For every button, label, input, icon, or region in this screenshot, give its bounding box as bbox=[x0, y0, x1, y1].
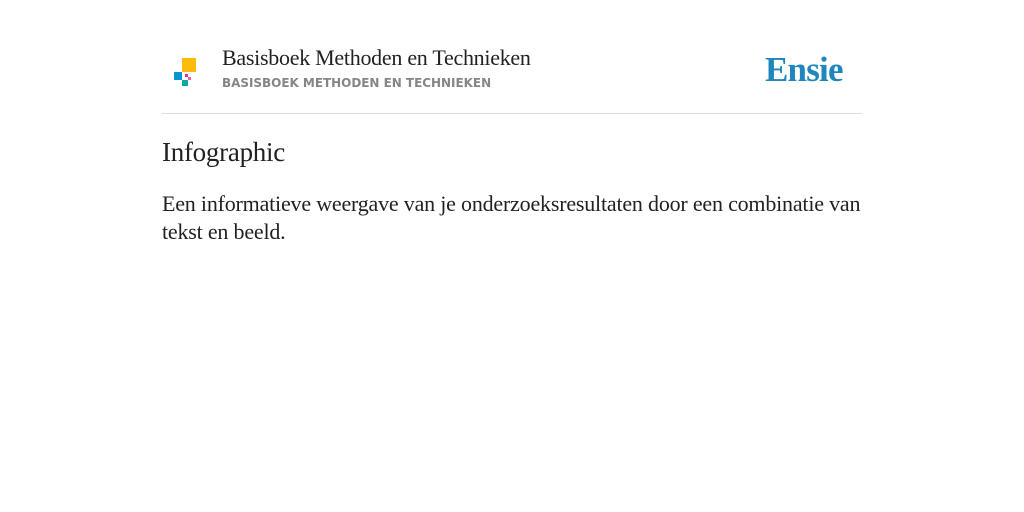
Ensie logo: Ensie bbox=[765, 50, 843, 89]
divider bbox=[162, 113, 862, 114]
book title: Basisboek Methoden en Technieken bbox=[222, 45, 531, 70]
header bbox=[174, 45, 843, 90]
definition text: Een informatieve weergave van je onderzoeksresultaten door een combinatie van bbox=[162, 191, 860, 216]
icon: book logo squares bbox=[174, 58, 196, 86]
definition text bbox=[162, 191, 860, 244]
heading: Infographic bbox=[162, 137, 285, 167]
definition text: tekst en beeld. bbox=[162, 219, 285, 244]
book subtitle: BASISBOEK METHODEN EN TECHNIEKEN bbox=[222, 76, 491, 90]
